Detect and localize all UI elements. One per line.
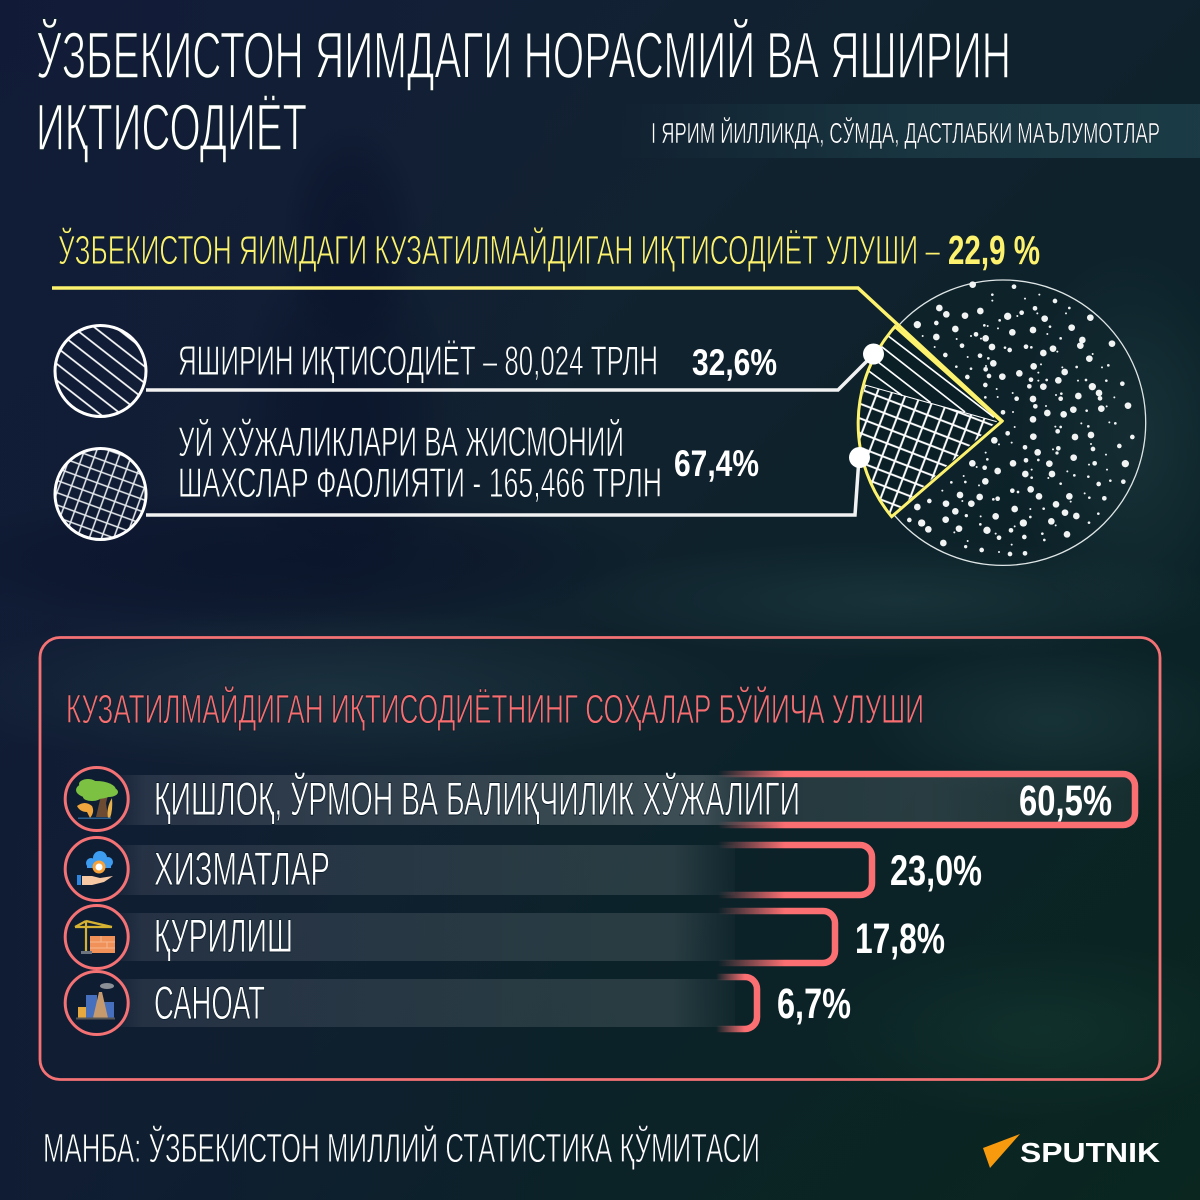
bar: construction: 17,8% xyxy=(855,915,945,963)
bar: construction xyxy=(105,909,945,963)
grid hatching: households xyxy=(857,385,997,515)
bar: services xyxy=(105,842,982,895)
bar: industry: 6,7% xyxy=(777,980,851,1028)
title: ИҚТИСОДИЁТ xyxy=(36,90,307,164)
bar: services: 23,0% xyxy=(890,847,982,895)
bar: services: ХИЗМАТЛАР xyxy=(154,842,330,895)
highlighted sector xyxy=(857,327,1002,517)
sector outline xyxy=(858,327,1002,517)
label: ШАХСЛАР ФАОЛИЯТИ - 165,466 ТРЛН xyxy=(178,459,662,506)
icon: crane and bricks xyxy=(65,906,128,968)
bar: industry xyxy=(105,976,851,1029)
connector dot xyxy=(863,344,884,364)
legend: hidden economy xyxy=(55,326,884,416)
pie chart xyxy=(857,280,1146,565)
logo: Sputnik: SPUTNIK xyxy=(1020,1137,1160,1168)
yellow leader line xyxy=(52,288,1003,422)
logo: Sputnik xyxy=(983,1134,1160,1168)
subtitle band xyxy=(620,104,1200,158)
icon: diagonal hatch circle xyxy=(55,326,146,416)
yellow heading: 22,9 % xyxy=(948,227,1040,273)
bar: industry: САНОАТ xyxy=(154,976,265,1029)
label: УЙ ХЎЖАЛИКЛАРИ ВА ЖИСМОНИЙ xyxy=(178,417,624,465)
title xyxy=(36,17,1011,164)
label xyxy=(178,417,662,506)
bar: agriculture: ҚИШЛОҚ, ЎРМОН ВА БАЛИҚЧИЛИК ХЎЖАЛИГИ xyxy=(154,772,800,825)
value: 32,6% xyxy=(692,342,777,383)
diagonal hatching: hidden economy xyxy=(868,336,994,417)
connector line xyxy=(146,354,874,390)
bar: construction: ҚУРИЛИШ xyxy=(154,909,293,962)
icon: orange arrow xyxy=(983,1134,1020,1168)
icon: tree and fish xyxy=(65,768,128,830)
scattered dots xyxy=(907,281,1135,556)
connector line xyxy=(146,458,859,515)
value: 67,4% xyxy=(674,443,759,484)
icon: hand and cloud xyxy=(65,838,128,900)
panel: sectors xyxy=(40,638,1160,1080)
connector dot xyxy=(849,447,870,468)
legend: households xyxy=(55,417,870,540)
icon: factory xyxy=(65,972,128,1034)
label: ЯШИРИН ИҚТИСОДИЁТ – 80,024 ТРЛН xyxy=(178,337,658,384)
source: МАНБА: ЎЗБЕКИСТОН МИЛЛИЙ СТАТИСТИКА ҚЎМИТАСИ xyxy=(43,1124,760,1171)
icon: grid hatch circle xyxy=(55,448,146,540)
bar: agriculture: 60,5% xyxy=(1019,777,1112,825)
